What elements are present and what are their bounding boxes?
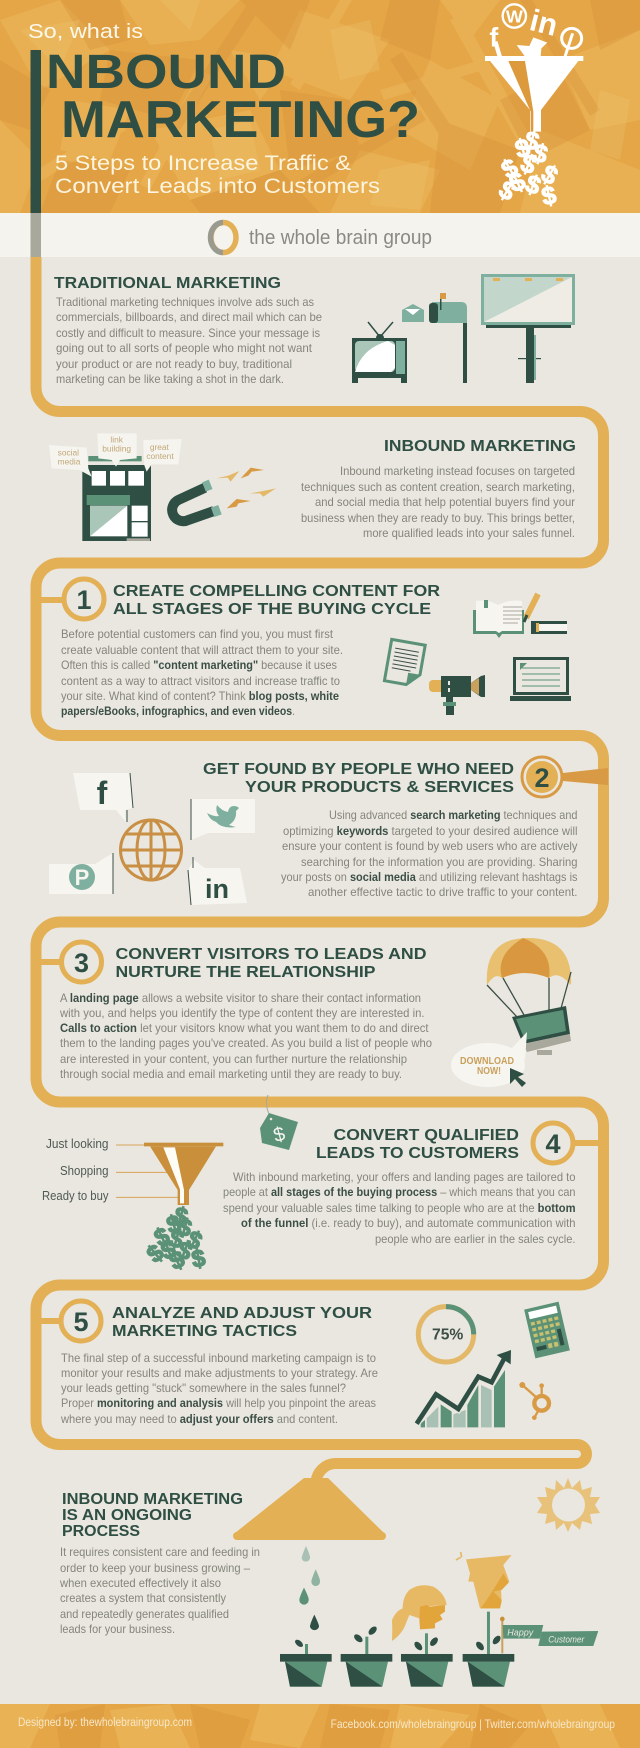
bubble: pinterest: P [75, 865, 89, 890]
bubble: facebook: f [97, 775, 108, 811]
body text: with you, and helps you identify the type of content they are interested in. [59, 1006, 425, 1020]
body text: another effective tactic to drive traffic to your content. [308, 885, 578, 899]
icon: header funnel: $ [521, 126, 542, 157]
icon: globe [120, 820, 182, 880]
body text: your site. What kind of content? Think blog posts, white [61, 689, 339, 703]
icon: funnel with dollars: $ [183, 1226, 206, 1256]
body text [59, 1545, 260, 1636]
step badge 5 [41, 1301, 101, 1341]
body text: Proper monitoring and analysis will help you pinpoint the areas [61, 1396, 376, 1410]
icon: header funnel: $ [512, 134, 533, 164]
chart: 75 percent ring [418, 1307, 474, 1362]
body text: Before potential customers can find you, you must first [61, 627, 334, 641]
body text [61, 627, 343, 718]
icon: funnel with dollars: $ [150, 1222, 174, 1252]
subtitle: Convert Leads into Customers [55, 175, 380, 198]
body text: commercials, billboards, and direct mail which can be [56, 310, 322, 324]
analytics icons [417, 1302, 570, 1427]
step badge 1: 1 [76, 585, 92, 615]
icon: funnel with dollars: $ [175, 1213, 195, 1243]
body text [59, 991, 432, 1081]
body text: order to keep your business growing – [60, 1561, 250, 1575]
icon: header funnel: $ [522, 170, 544, 201]
body text: people who are earlier in the sales cycle. [375, 1232, 576, 1246]
body text [301, 464, 575, 540]
heading: YOUR PRODUCTS & SERVICES [245, 779, 514, 796]
subtitle [55, 152, 380, 198]
body text: costly and difficult to measure. Since your message is [56, 326, 320, 340]
body text [56, 295, 322, 386]
body text: Often this is called "content marketing" because it uses [61, 658, 337, 672]
pot 2 [341, 1625, 392, 1687]
body text: your leads getting "stuck" somewhere in the sales funnel? [61, 1381, 346, 1395]
icon: store with speech bubbles and magnet: social [58, 448, 79, 458]
body text: going out to all sorts of people who might not want [56, 341, 313, 355]
heading: TRADITIONAL MARKETING [54, 275, 281, 292]
body text: Inbound marketing instead focuses on targeted [340, 464, 575, 478]
icon: header funnel: $ [539, 181, 559, 211]
heading: PROCESS [62, 1523, 140, 1540]
body text: your product or are not ready to buy, traditional [56, 357, 292, 371]
body text: through social media and email marketing until they are ready to buy. [60, 1067, 402, 1081]
body text: business when they are ready to buy. This brings better, [301, 511, 575, 525]
step badge 3 [41, 942, 102, 982]
footer panel [0, 1704, 640, 1748]
body text: Traditional marketing techniques involve ads such as [56, 295, 314, 309]
heading [62, 1491, 243, 1540]
icon: price tag [260, 1095, 298, 1150]
water drops [299, 1546, 320, 1630]
footer credit: Designed by: thewholebraingroup.com [18, 1717, 192, 1729]
icon: header funnel: $ [536, 160, 562, 191]
heading: ANALYZE AND ADJUST YOUR [112, 1305, 373, 1322]
icon: laptop [510, 658, 571, 701]
body text [60, 1351, 378, 1426]
icon: funnel with dollars: $ [171, 1202, 191, 1231]
panel: ongoing process [59, 1478, 600, 1687]
heading [316, 1127, 519, 1162]
icon: funnel with dollars: $ [158, 1236, 180, 1266]
body text: and social media that help potential buyers find your [315, 495, 575, 509]
icon: open book and pen [473, 594, 567, 638]
panel: step 5 [41, 1301, 570, 1427]
heading: INBOUND MARKETING [384, 438, 576, 455]
title: MARKETING? [61, 91, 420, 149]
heading: LEADS TO CUSTOMERS [316, 1145, 519, 1162]
funnel labels [42, 1137, 109, 1203]
callout: download now: NOW! [477, 1065, 501, 1077]
body text: of the funnel (i.e. ready to buy), and automate communication with [241, 1216, 576, 1230]
body text: people at all stages of the buying process – which means that you can [223, 1185, 576, 1199]
icon: header funnel: $ [505, 167, 530, 198]
icon: watering head [233, 1478, 386, 1540]
banner: happy customer [503, 1625, 598, 1646]
icon: calculator [524, 1302, 570, 1358]
body text: more qualified leads into your sales funnel. [363, 526, 575, 540]
heading [203, 761, 514, 796]
icon: parachute with monitor [487, 938, 571, 1055]
icon: header funnel: f [489, 23, 498, 53]
icon: price tag: $ [271, 1123, 287, 1147]
heading: ALL STAGES OF THE BUYING CYCLE [113, 601, 431, 618]
body text [223, 1170, 576, 1246]
panel: inbound marketing [49, 433, 576, 541]
icon: header funnel: in [526, 3, 561, 43]
icon: store with speech bubbles and magnet: link [110, 434, 124, 444]
body text: Using advanced search marketing techniques and [329, 808, 578, 822]
body text: your posts on social media and utilizing relevant hashtags is [281, 870, 578, 884]
panel: traditional marketing [54, 274, 575, 386]
chart: 75 percent ring: 75% [432, 1327, 463, 1344]
heading: CONVERT QUALIFIED [334, 1127, 519, 1144]
step badge 5: 5 [73, 1307, 89, 1337]
icon: sun [537, 1478, 600, 1532]
body text: when executed effectively it also [59, 1576, 221, 1590]
icon: header funnel: $ [497, 153, 523, 185]
heading [113, 583, 441, 618]
body text: optimizing keywords targeted to your desired audience will [283, 824, 578, 838]
bubble: linkedin [188, 857, 247, 905]
icon: store with speech bubbles and magnet: great [150, 442, 169, 452]
icon: funnel with dollars: $ [190, 1245, 207, 1274]
icon: document [384, 639, 425, 687]
body text: content as a way to attract visitors and increase traffic to [61, 674, 340, 688]
icon: video camera [429, 675, 485, 715]
icon: funnel with dollars: $ [166, 1225, 186, 1255]
funnel labels: Ready to buy [42, 1189, 109, 1203]
pot 1 [280, 1638, 332, 1687]
callout: download now: DOWNLOAD [460, 1055, 514, 1067]
body text: A landing page allows a website visitor to share their contact information [60, 991, 421, 1005]
body text: them to the landing pages you've created. As you build a list of people who [60, 1036, 432, 1050]
heading: GET FOUND BY PEOPLE WHO NEED [203, 761, 514, 778]
heading: CREATE COMPELLING CONTENT FOR [113, 583, 441, 600]
timeline path [36, 257, 604, 1482]
heading [112, 1305, 373, 1340]
funnel labels: Shopping [60, 1164, 109, 1178]
body text: techniques such as content creation, search marketing, [301, 480, 575, 494]
icon: funnel with dollars: $ [142, 1239, 169, 1269]
body text: where you may need to adjust your offers and content. [60, 1412, 338, 1426]
callout: download now [451, 1032, 527, 1087]
icon: header funnel: $ [494, 176, 520, 207]
icon: header funnel: $ [517, 149, 540, 180]
funnel labels: Just looking [46, 1137, 109, 1151]
step badge 4 [533, 1123, 598, 1163]
panel: step 3 [41, 938, 571, 1087]
step badge 2: 2 [534, 763, 550, 793]
icon: store with speech bubbles and magnet [49, 433, 276, 541]
pot 4 with man [456, 1552, 514, 1687]
panel: step 1 [41, 579, 571, 718]
logo band [0, 213, 640, 257]
body text: and repeatedly generates qualified [60, 1607, 229, 1621]
body text: papers/eBooks, infographics, and even videos. [61, 704, 295, 718]
step badge 2 [522, 757, 608, 797]
icon: store with speech bubbles and magnet: building [102, 444, 131, 454]
body text: spend your valuable sales time talking to people who are at the bottom [223, 1201, 576, 1215]
growing plants illustration [280, 1546, 598, 1687]
kicker: So, what is [28, 21, 143, 43]
bubble: facebook [73, 773, 133, 822]
body text: Calls to action let your visitors know what you want them to do and direct [60, 1021, 429, 1035]
icon: header funnel: $ [530, 139, 551, 169]
heading: CONVERT VISITORS TO LEADS AND [116, 946, 426, 963]
company name: the whole brain group [249, 227, 432, 249]
body text: It requires consistent care and feeding in [60, 1545, 260, 1559]
icon: hubspot [519, 1382, 549, 1420]
icon: funnel with dollars [116, 1143, 223, 1276]
heading: INBOUND MARKETING [62, 1491, 243, 1508]
icon: funnel with dollars: $ [174, 1236, 195, 1266]
body text: creates a system that consistently [60, 1591, 226, 1605]
body text: create valuable content that will attract them to your site. [61, 643, 343, 657]
title [46, 46, 420, 149]
title bar [30, 50, 41, 257]
heading [116, 946, 426, 981]
title: NBOUND [46, 46, 286, 99]
icon: store with speech bubbles and magnet: content [146, 451, 174, 461]
step badge 3: 3 [74, 948, 89, 978]
pot 3 with girl [392, 1585, 453, 1687]
icon: funnel with dollars: $ [164, 1210, 184, 1240]
body text: leads for your business. [60, 1622, 175, 1636]
logo ring [210, 222, 236, 252]
body text [281, 808, 578, 899]
body text: are interested in your content, you can further nurture the relationship [60, 1052, 407, 1066]
panel: step 2 [49, 757, 608, 905]
body text: marketing can be like taking a shot in the dark. [56, 372, 284, 386]
chart: rising bars and arrow [417, 1350, 511, 1427]
bubble: linkedin: in [205, 874, 229, 904]
step badge 4: 4 [545, 1129, 561, 1159]
bubble: twitter [191, 799, 255, 840]
heading: MARKETING TACTICS [112, 1323, 297, 1340]
body text: With inbound marketing, your offers and landing pages are tailored to [233, 1170, 576, 1184]
bubble: pinterest [49, 853, 113, 894]
panel: step 4 [42, 1095, 598, 1276]
heading: IS AN ONGOING [62, 1507, 192, 1524]
icon: mailbox [402, 293, 467, 383]
body text: ensure your content is found by web users who are actively [282, 839, 578, 853]
header panel [0, 0, 640, 257]
icon: store with speech bubbles and magnet: media [58, 456, 81, 466]
icon: billboard [481, 274, 575, 383]
banner: happy customer: Customer [548, 1635, 585, 1645]
icon: header funnel [485, 3, 583, 211]
body text: monitor your results and make adjustments to your strategy. Are [61, 1366, 378, 1380]
step badge 1 [41, 579, 104, 619]
icon: tv [352, 322, 407, 383]
body text: The final step of a successful inbound marketing campaign is to [61, 1351, 376, 1365]
icon: funnel with dollars: $ [165, 1246, 189, 1276]
icon: header funnel: W [506, 7, 523, 27]
subtitle: 5 Steps to Increase Traffic & [55, 152, 351, 175]
heading: NURTURE THE RELATIONSHIP [116, 964, 376, 981]
body text: searching for the information you are providing. Sharing [301, 855, 578, 869]
banner: happy customer: Happy [507, 1628, 534, 1638]
